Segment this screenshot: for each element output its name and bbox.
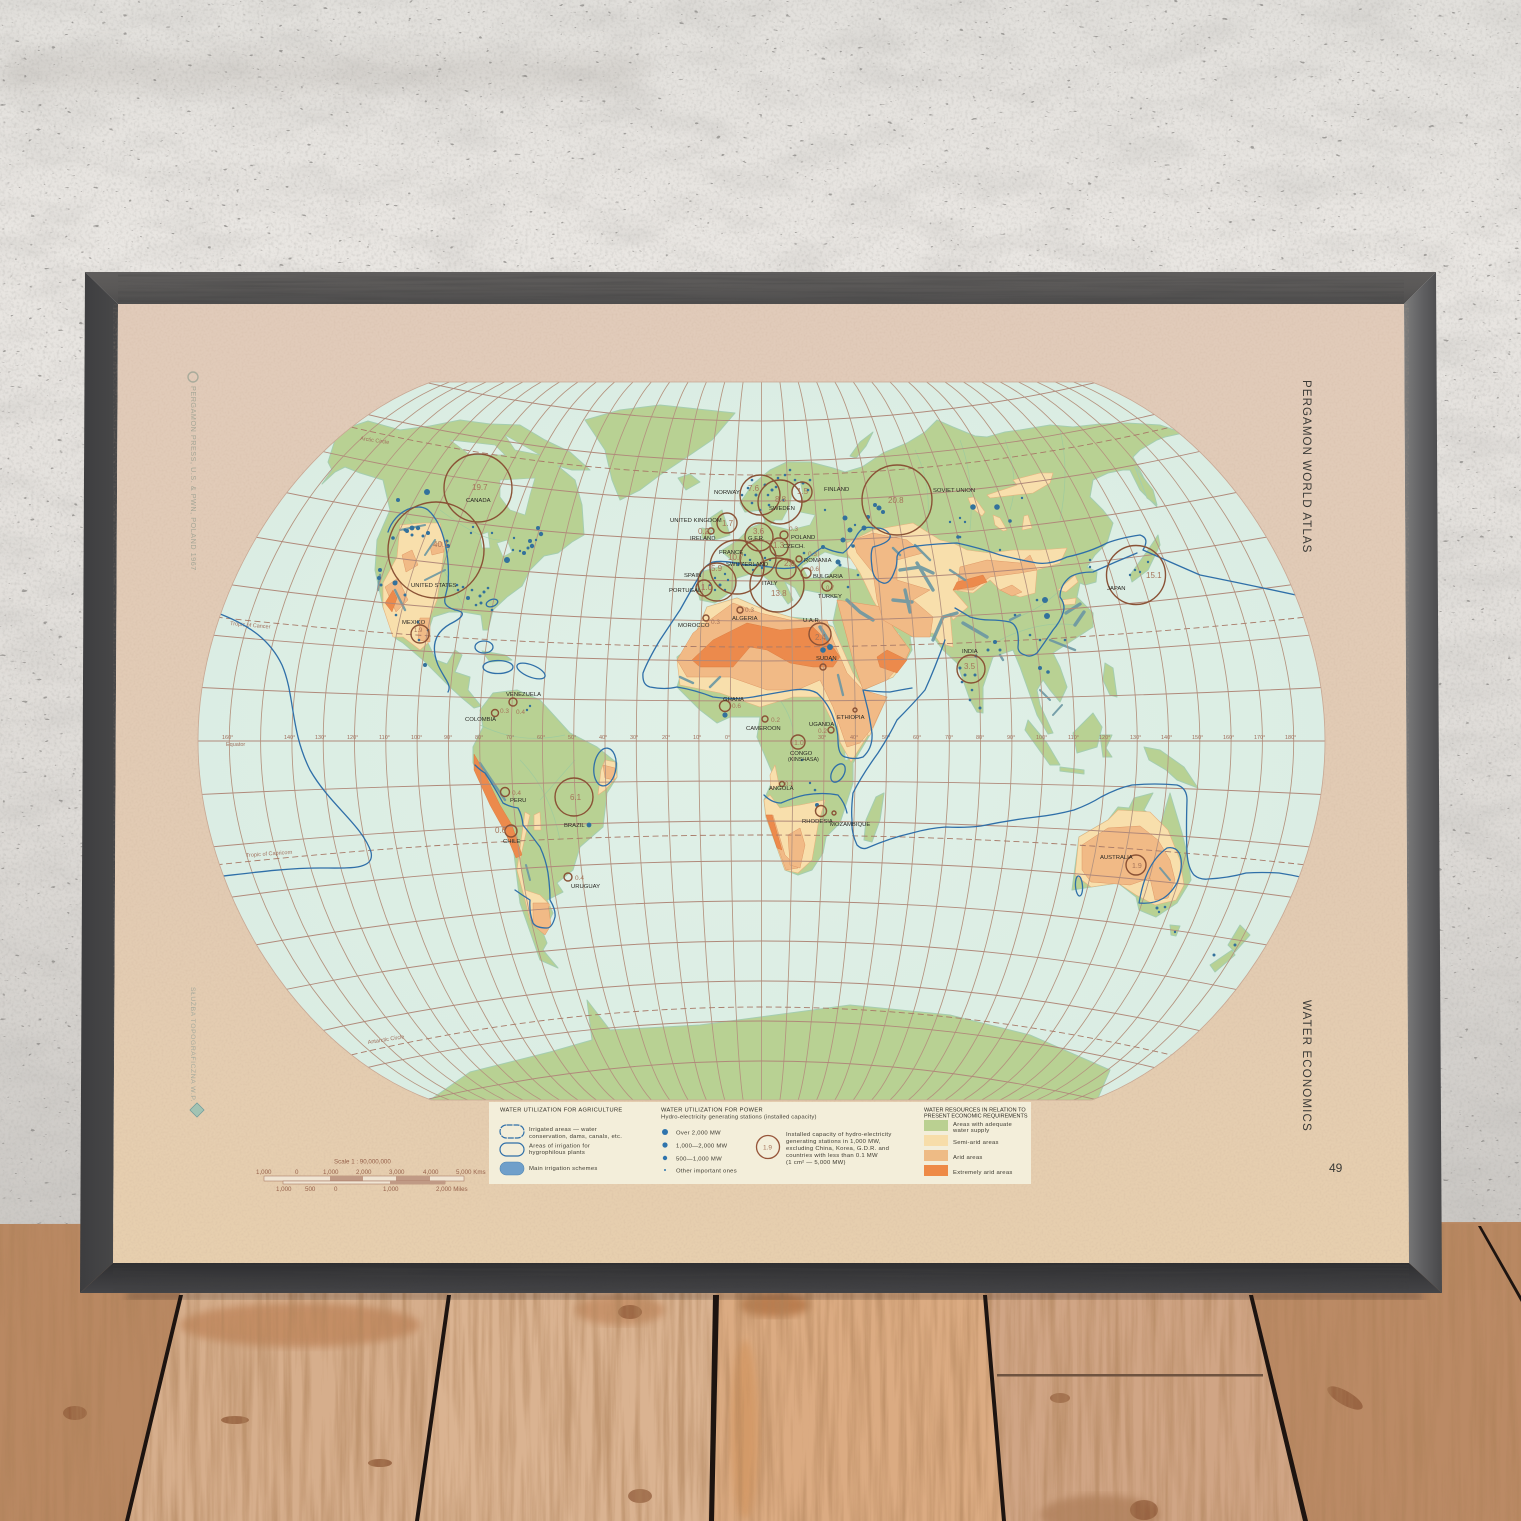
capacity circles by country (388, 454, 1166, 881)
legend: agriculture: WATER UTILIZATION FOR AGRICULTURE (500, 1108, 623, 1114)
printer imprint: SŁUŻBA TOPOGRAFICZNA W.P. (189, 987, 198, 1102)
capacity values: 40.1 (433, 540, 449, 549)
legend: water resources: PRESENT ECONOMIC REQUIREMENTS (924, 1114, 1028, 1120)
legend: water resources: Extremely arid areas (953, 1170, 1013, 1176)
scale bar: Scale 1 : 90,000,000 (334, 1158, 391, 1166)
legend: power: 1,000—2,000 MW (676, 1144, 728, 1150)
graticule labels: 30° (630, 735, 638, 741)
scale bar: 3,000 (389, 1169, 405, 1176)
tropics and polar circles (dashed) (220, 427, 1304, 1055)
country labels: CZECH. (783, 544, 805, 550)
legend: agriculture: conservation, dams, canals, etc. (529, 1134, 622, 1140)
capacity values: 1.5 (797, 487, 809, 496)
legend: water resources: Areas with adequate (953, 1122, 1012, 1128)
graticule labels: 50° (882, 735, 890, 741)
country labels: COLOMBIA (465, 717, 496, 723)
country labels: SWITZERLAND (726, 562, 768, 568)
scale bar: 2,000 (356, 1169, 372, 1176)
country labels: (KINSHASA) (788, 757, 819, 763)
scale bar: 1,000 (256, 1169, 272, 1176)
country labels: SUDAN (816, 656, 837, 662)
scale bar: 0 (334, 1186, 338, 1193)
graticule labels: 90° (444, 735, 452, 741)
legend: power: Hydro-electricity generating stations (installed capacity) (661, 1114, 817, 1120)
capacity values: 5.9 (711, 564, 723, 573)
extremely arid areas (385, 575, 987, 858)
country labels: POLAND (791, 535, 815, 541)
graticule labels: 40° (599, 735, 607, 741)
graticule labels: 160° (1223, 735, 1234, 741)
capacity values: 1.0 (701, 583, 713, 592)
country labels: ALGERIA (732, 616, 758, 622)
legend: water resources: water supply (952, 1128, 989, 1134)
capacity values: 1.9 (414, 628, 423, 634)
legend: power: generating stations in 1,000 MW, (786, 1139, 881, 1145)
country labels: ROMANIA (804, 558, 832, 564)
rivers and relief contours (400, 430, 1075, 840)
inland seas, bays and lakes (450, 435, 908, 760)
scale bar: 1,000 (276, 1186, 292, 1193)
country labels: CONGO (790, 751, 813, 757)
country labels: TURKEY (818, 594, 842, 600)
graticule labels: 100° (411, 735, 422, 741)
country labels: UNITED KINGDOM (670, 518, 722, 524)
graticule labels: 10° (693, 735, 701, 741)
graticule labels: 100° (1036, 735, 1047, 741)
country labels: G.F.R. (748, 536, 765, 542)
scale bar: 500 (305, 1186, 316, 1193)
country labels: MEXICO (402, 620, 426, 626)
capacity values: 0.4 (512, 790, 521, 797)
capacity values: 0.3 (745, 607, 754, 614)
capacity values: 2.0 (784, 559, 796, 568)
country labels: PERU (510, 798, 526, 804)
capacity values: 0.1 (785, 782, 794, 788)
scale bar: 2,000 Miles (436, 1186, 468, 1193)
capacity values: 0.2 (698, 527, 710, 536)
graticule labels: 80° (475, 735, 483, 741)
graticule labels: Antarctic Circle (367, 1034, 405, 1046)
country labels: IRELAND (690, 536, 716, 542)
capacity values: 0.4 (575, 875, 584, 882)
legend: power: excluding China, Korea, G.D.R. and (786, 1146, 889, 1152)
country labels: MOZAMBIQUE (830, 822, 870, 828)
continents: land with adequate water supply (322, 405, 1250, 1105)
graticule labels: 70° (506, 735, 514, 741)
legend: power: WATER UTILIZATION FOR POWER (661, 1108, 763, 1114)
capacity values: 6.1 (570, 793, 582, 802)
hydro-electric stations (blue dots) (377, 469, 1236, 956)
scale bar: 1,000 (383, 1186, 399, 1193)
legend: power: (1 cm² — 5,000 MW) (786, 1160, 846, 1166)
capacity values: 0.3 (711, 619, 720, 626)
capacity values: 0.3 (808, 551, 817, 558)
page number: 49 (1329, 1161, 1343, 1175)
legend: water resources: WATER RESOURCES IN RELATION TO (924, 1108, 1026, 1114)
legend: power: Installed capacity of hydro-electricity (786, 1132, 892, 1138)
graticule labels (222, 436, 1296, 1046)
picture frame (80, 272, 1442, 1299)
country labels: JAPAN (1107, 586, 1126, 592)
panel: legend (489, 1102, 1031, 1184)
capacity values: 0.2 (771, 717, 780, 724)
country labels: ANGOLA (769, 786, 794, 792)
scale bar: 4,000 (423, 1169, 439, 1176)
country labels: BULGARIA (813, 574, 843, 580)
country labels: GHANA (723, 697, 744, 703)
graticule labels: 170° (1254, 735, 1265, 741)
capacity values: 2.4 (815, 633, 827, 642)
country labels: SOVIET UNION (933, 488, 975, 494)
map outline (198, 382, 1325, 1100)
capacity values: 0.6 (810, 566, 819, 573)
legend: power: Other important ones (676, 1168, 737, 1174)
country labels: AUSTRALIA (1100, 855, 1133, 861)
graticule labels: 40° (850, 735, 858, 741)
graticule labels: 110° (379, 735, 390, 741)
graticule labels: Equator (226, 742, 245, 748)
country labels: SWEDEN (769, 506, 795, 512)
graticule labels: Tropic of Cancer (230, 621, 271, 631)
capacity values: 1.0 (794, 740, 804, 747)
graticule: meridians (229, 382, 1294, 1100)
scale bar: 5,000 Kms (456, 1169, 486, 1176)
country labels: CHILE (503, 839, 520, 845)
capacity values: 1.9 (1132, 863, 1142, 870)
legend: agriculture: Main irrigation schemes (529, 1166, 598, 1172)
ocean (190, 375, 1335, 1105)
capacity values: 1.7 (722, 519, 734, 528)
country labels (402, 487, 1133, 890)
graticule labels: 140° (1161, 735, 1172, 741)
panel: atlas page paper (113, 304, 1409, 1263)
graticule labels: 60° (913, 735, 921, 741)
side title: Pergamon World Atlas: PERGAMON WORLD ATLAS (1300, 380, 1313, 553)
capacity values: 20.8 (888, 496, 904, 505)
graticule labels: 120° (1099, 735, 1110, 741)
graticule labels: 180° (1285, 735, 1296, 741)
capacity values: 0.2 (818, 728, 827, 735)
capacity values: 13.8 (771, 589, 787, 598)
capacity values: 0.7 (826, 586, 835, 592)
graticule labels: 130° (1130, 735, 1141, 741)
blue limit lines of water utilization (215, 507, 1305, 928)
scale bar: 1,000 (323, 1169, 339, 1176)
capacity values: 0.3 (789, 526, 798, 533)
graticule labels: 150° (1192, 735, 1203, 741)
printer imprint (189, 987, 204, 1117)
capacity values: 0.6 (732, 703, 741, 710)
capacity values: 1.3 (773, 541, 785, 550)
graticule: parallels (198, 382, 1325, 1100)
country labels: NORWAY (714, 490, 740, 496)
legend: power: Over 2,000 MW (676, 1130, 721, 1136)
legend: water resources (924, 1108, 1028, 1176)
capacity values: 8.8 (775, 495, 787, 504)
capacity values: 7.6 (748, 484, 760, 493)
country labels: MOROCCO (678, 623, 710, 629)
legend: power: countries with less than 0.1 MW (786, 1153, 878, 1159)
capacity values: 0.3 (500, 708, 509, 715)
copyright imprint: PERGAMON PRESS, U.S. & PWN, POLAND 1967 (189, 386, 198, 571)
scale bar (256, 1158, 486, 1193)
country labels: CAMEROON (746, 726, 781, 732)
graticule labels: 30° (818, 735, 826, 741)
legend: water resources: Arid areas (953, 1155, 983, 1161)
country labels: CANADA (466, 498, 491, 504)
background: wooden floor planks (0, 1222, 1521, 1521)
graticule labels: 160° (222, 735, 233, 741)
graticule labels: 0° (725, 735, 730, 741)
legend: water resources: Semi-arid areas (953, 1140, 999, 1146)
capacity values: 15.1 (1146, 571, 1162, 580)
country labels: ITALY (762, 581, 778, 587)
country labels: FRANCE (719, 550, 743, 556)
country labels: RHODESIA (802, 819, 833, 825)
graticule labels: Tropic of Capricorn (246, 850, 293, 859)
country labels: UNITED STATES (411, 583, 457, 589)
panel: world map (198, 382, 1325, 1100)
capacity values: 0.6 (495, 826, 507, 835)
side title: Water Economics: WATER ECONOMICS (1300, 1000, 1313, 1132)
graticule labels: 140° (284, 735, 295, 741)
legend: power: 500—1,000 MW (676, 1156, 722, 1162)
capacity values: 10.7 (728, 553, 744, 562)
capacity values: 3.5 (964, 662, 976, 671)
semi-arid areas (383, 473, 1184, 920)
graticule labels: 120° (347, 735, 358, 741)
graticule labels: 20° (662, 735, 670, 741)
country labels: BRAZIL (564, 823, 585, 829)
country labels: SPAIN (684, 573, 701, 579)
capacity values: 0.4 (516, 709, 525, 716)
country labels: FINLAND (824, 487, 849, 493)
graticule labels: 70° (945, 735, 953, 741)
country labels: ETHIOPIA (837, 715, 865, 721)
graticule labels: 110° (1068, 735, 1079, 741)
country labels: VENEZUELA (506, 692, 541, 698)
country labels: PORTUGAL (669, 588, 702, 594)
scale bar: 0 (295, 1169, 299, 1176)
capacity values: 19.7 (472, 483, 488, 492)
arid areas (385, 533, 1175, 935)
legend: power (661, 1108, 892, 1174)
legend: agriculture: hygrophilous plants (529, 1150, 585, 1156)
country labels: UGANDA (809, 722, 834, 728)
graticule labels: 60° (537, 735, 545, 741)
country labels: URUGUAY (571, 884, 600, 890)
legend: agriculture (500, 1108, 623, 1175)
graticule labels: Arctic Circle (360, 436, 390, 446)
graticule labels: 80° (976, 735, 984, 741)
graticule labels: 90° (1007, 735, 1015, 741)
country labels: INDIA (962, 649, 978, 655)
main irrigation schemes (378, 525, 1170, 880)
graticule labels: 50° (568, 735, 576, 741)
legend: agriculture: Areas of irrigation for (529, 1144, 590, 1150)
legend: power: 1.9 (763, 1144, 772, 1152)
country labels: U.A.R. (803, 618, 821, 624)
capacity values (414, 483, 1162, 882)
capacity values: 3.6 (753, 527, 765, 536)
legend: agriculture: Irrigated areas — water (529, 1127, 597, 1133)
graticule labels: 130° (315, 735, 326, 741)
